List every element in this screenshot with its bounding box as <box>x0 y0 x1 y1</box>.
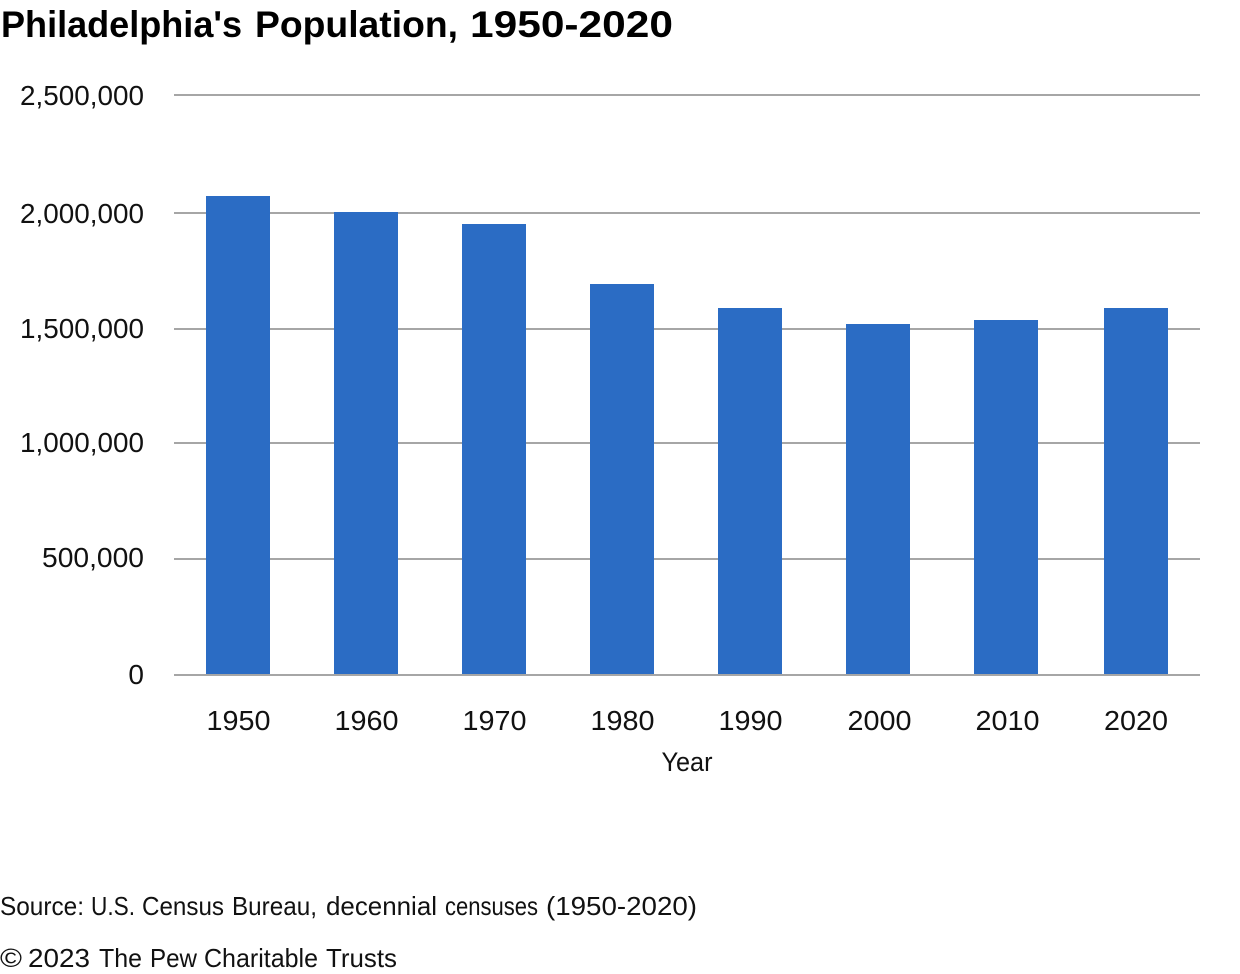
source note: decennial <box>326 891 437 921</box>
title: Philadelphia's <box>1 4 242 45</box>
copyright: 2023 <box>28 943 90 973</box>
copyright: The <box>99 943 142 973</box>
copyright: Charitable <box>204 943 318 973</box>
y axis labels: 1,500,000 <box>20 313 144 344</box>
source note: Bureau, <box>232 891 317 921</box>
x axis labels: 1980 <box>590 705 654 736</box>
source note <box>0 891 697 921</box>
source note: Census <box>142 891 224 921</box>
bar chart <box>206 196 1168 674</box>
source note: Source: <box>0 891 84 921</box>
y axis labels <box>20 80 144 690</box>
x axis labels: 2000 <box>848 705 912 736</box>
x axis labels: 1970 <box>462 705 526 736</box>
copyright <box>0 943 397 973</box>
copyright: © <box>0 943 22 973</box>
x axis labels: 1990 <box>718 705 782 736</box>
x axis title: Year <box>662 747 712 777</box>
x axis labels: 2020 <box>1104 705 1168 736</box>
y axis labels: 0 <box>128 659 144 690</box>
y axis labels: 1,000,000 <box>20 427 144 458</box>
title: Population, <box>255 4 458 45</box>
source note: (1950-2020) <box>546 891 697 921</box>
copyright: Trusts <box>326 943 397 973</box>
title: 1950-2020 <box>470 4 673 45</box>
copyright: Pew <box>150 943 197 973</box>
y axis labels: 500,000 <box>42 542 144 573</box>
y axis labels: 2,500,000 <box>20 80 144 111</box>
source note: censuses <box>445 891 538 921</box>
x axis labels: 2010 <box>976 705 1040 736</box>
x axis labels: 1950 <box>206 705 270 736</box>
title <box>1 4 673 45</box>
y axis labels: 2,000,000 <box>20 198 144 229</box>
x axis labels <box>206 705 1168 736</box>
x axis labels: 1960 <box>334 705 398 736</box>
source note: U.S. <box>91 891 135 921</box>
